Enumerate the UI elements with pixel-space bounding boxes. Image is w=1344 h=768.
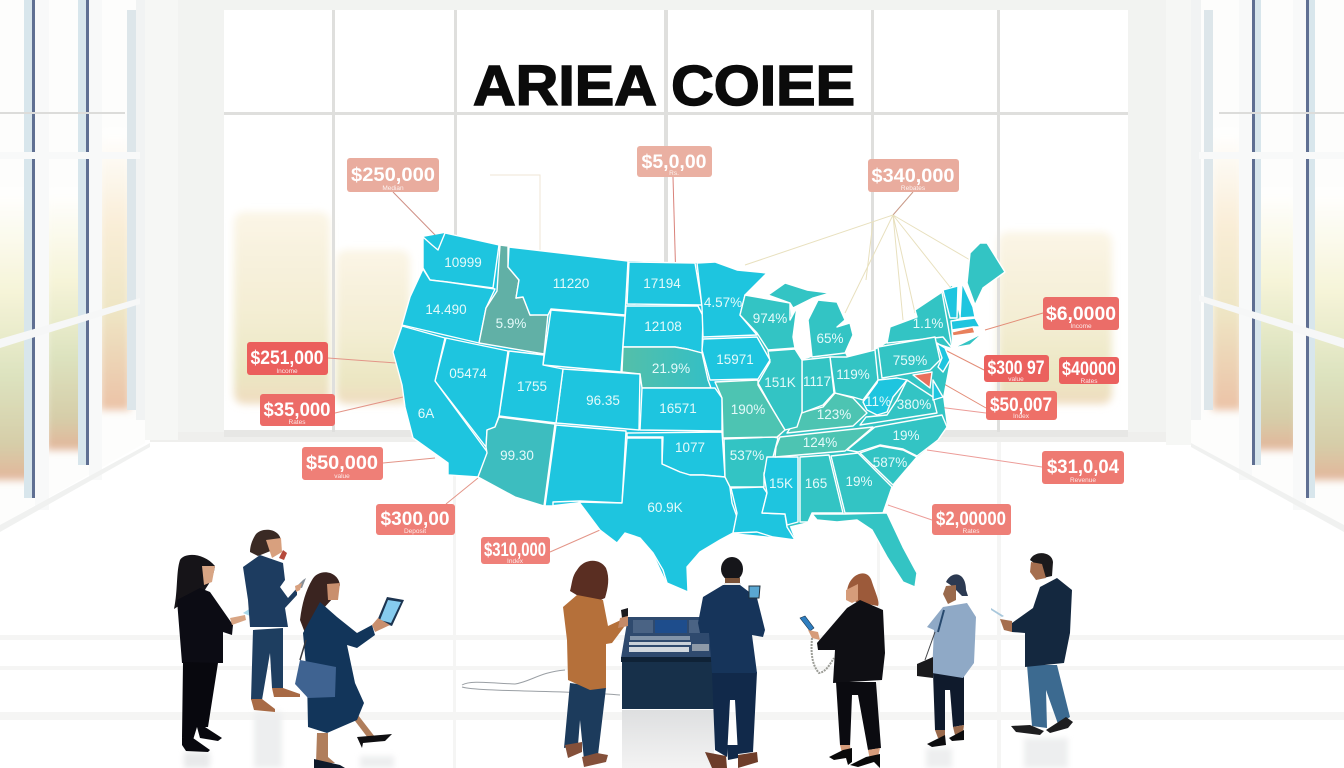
state: Washington: 10999 bbox=[444, 255, 482, 270]
label: left 2 bbox=[260, 394, 335, 426]
floor bands bbox=[0, 442, 1344, 768]
label: bottom centre: Index bbox=[507, 558, 524, 565]
label: bottom left bbox=[376, 504, 455, 535]
state: South Carolina: 587% bbox=[873, 455, 907, 470]
state: Florida bbox=[812, 513, 917, 587]
label: right 5: $31,0,04 bbox=[1047, 457, 1119, 478]
state: Texas bbox=[579, 438, 737, 592]
label: bottom left: Deposit bbox=[404, 528, 426, 535]
label: right 5 bbox=[1042, 451, 1124, 484]
state: Illinois bbox=[758, 349, 802, 430]
state: Nevada bbox=[435, 338, 508, 447]
label: top right: Rebates bbox=[901, 185, 926, 192]
person: woman in black with corded phone bbox=[800, 573, 885, 768]
state: Connecticut and Rhode Island bbox=[952, 327, 975, 336]
label: left 2: Rates bbox=[289, 419, 306, 426]
label: right 2 bbox=[984, 355, 1049, 383]
label: top centre bbox=[637, 146, 712, 177]
state: Michigan lower bbox=[808, 300, 853, 357]
label: right 6: $2,00000 bbox=[936, 509, 1006, 530]
state: Vermont bbox=[943, 286, 958, 318]
label: right 1: Income bbox=[1070, 323, 1092, 330]
state: Oklahoma: 1077 bbox=[675, 440, 705, 455]
state: Delaware bbox=[933, 380, 943, 400]
state: Louisiana bbox=[731, 487, 795, 540]
central window: mullions bbox=[224, 10, 1128, 432]
floor reflections bbox=[184, 712, 1068, 768]
state: Mississippi: 15K bbox=[769, 476, 793, 491]
state: New York bbox=[887, 292, 952, 348]
state: Ohio: 119% bbox=[836, 367, 870, 382]
state: North Carolina bbox=[847, 415, 947, 456]
console reflection bbox=[622, 710, 714, 768]
state: California bbox=[393, 326, 488, 477]
state: Kansas bbox=[640, 388, 722, 431]
state: Minnesota bbox=[697, 262, 767, 337]
state: Nebraska: 21.9% bbox=[652, 361, 690, 376]
state: Arkansas: 537% bbox=[730, 448, 764, 463]
label: top left: $250,000 bbox=[351, 165, 435, 186]
label: top centre: $5,0,00 bbox=[642, 152, 706, 173]
label: left 1: Income bbox=[276, 368, 298, 375]
state: Alabama bbox=[800, 455, 843, 522]
state: Idaho bbox=[479, 245, 548, 354]
state: Mississippi bbox=[762, 457, 798, 525]
label: left 2: $35,000 bbox=[264, 400, 330, 421]
person: woman in blue-grey coat bbox=[917, 574, 976, 747]
state: Missouri bbox=[715, 380, 785, 438]
state: West Virginia: 11% bbox=[865, 394, 891, 409]
state: Montana bbox=[508, 247, 628, 315]
state: Indiana: 1117 bbox=[803, 374, 831, 389]
state: Montana: 11220 bbox=[553, 276, 589, 291]
state: Michigan lower: 65% bbox=[816, 331, 844, 346]
person: woman in navy jacket on phone bbox=[243, 530, 306, 712]
state: South Dakota bbox=[623, 306, 703, 353]
state: Michigan upper bbox=[768, 283, 830, 308]
state: Oregon bbox=[402, 269, 495, 343]
state: Kentucky: 123% bbox=[817, 407, 851, 422]
state: Maryland bbox=[913, 372, 932, 388]
label: top centre: Rs. bbox=[669, 170, 679, 177]
person: woman in black with tablet bbox=[174, 555, 262, 752]
state: Georgia: 19% bbox=[845, 474, 873, 489]
state: New Mexico bbox=[545, 425, 626, 506]
label: left 1: $251,000 bbox=[250, 348, 324, 369]
state: Pennsylvania bbox=[878, 337, 940, 378]
label: right 4: $50,007 bbox=[990, 395, 1052, 416]
state: South Carolina bbox=[860, 446, 917, 485]
state: Georgia bbox=[831, 453, 892, 513]
label: bottom left: $300,00 bbox=[380, 509, 450, 530]
label: right 2: $300 97 bbox=[988, 358, 1044, 379]
label: right 1 bbox=[1043, 297, 1119, 330]
label: bottom centre: $310,000 bbox=[484, 540, 546, 561]
label: right 5: Revenue bbox=[1070, 477, 1096, 484]
label: right 4: Index bbox=[1013, 413, 1030, 420]
state: Oregon: 14.490 bbox=[425, 302, 467, 317]
state: Arkansas bbox=[724, 437, 778, 487]
state: Massachusetts bbox=[951, 318, 980, 330]
right side windows bbox=[1166, 0, 1344, 532]
map of the United States bbox=[393, 233, 1005, 592]
label: right 3 bbox=[1059, 357, 1119, 385]
state: Nebraska bbox=[622, 347, 711, 388]
label: top right bbox=[868, 159, 959, 192]
state: Washington bbox=[423, 233, 499, 288]
label: left 3: value bbox=[334, 473, 350, 480]
state: Idaho: 5.9% bbox=[496, 316, 526, 331]
label: right 6 bbox=[932, 504, 1011, 535]
label: left 3: $50,000 bbox=[306, 453, 378, 474]
label: left 1 bbox=[247, 342, 328, 375]
state: Utah: 1755 bbox=[517, 379, 547, 394]
state: Wisconsin: 974% bbox=[753, 311, 787, 326]
label: left 3 bbox=[302, 447, 383, 480]
label: right 3: $40000 bbox=[1062, 359, 1116, 380]
state: South Dakota: 12108 bbox=[644, 319, 682, 334]
state: Nevada: 05474 bbox=[449, 366, 487, 381]
person: man in navy blazer with tablet bbox=[991, 553, 1073, 735]
state: Texas: 60.9K bbox=[647, 500, 683, 515]
state: Indiana bbox=[802, 357, 834, 413]
label: right 4 bbox=[986, 391, 1057, 420]
label: right 1: $6,0000 bbox=[1046, 304, 1116, 325]
label: top left: Median bbox=[382, 185, 404, 192]
left side windows bbox=[0, 0, 178, 532]
state: Iowa bbox=[702, 337, 770, 380]
console machine bbox=[621, 617, 714, 709]
state: Kansas: 16571 bbox=[659, 401, 697, 416]
connector lines bbox=[328, 175, 1043, 552]
state: Minnesota: 4.57% bbox=[704, 295, 742, 310]
state: Utah bbox=[499, 351, 563, 423]
person: man in navy suit from behind bbox=[698, 557, 765, 768]
label: top right: $340,000 bbox=[872, 166, 954, 187]
state: Arizona: 99.30 bbox=[500, 448, 534, 463]
state: New York: 1.1% bbox=[913, 316, 943, 331]
label: right 2: value bbox=[1008, 376, 1024, 383]
label: top left bbox=[347, 158, 439, 192]
state: Colorado: 96.35 bbox=[586, 393, 620, 408]
state: California: 6A bbox=[418, 406, 434, 421]
person: woman in orange coat bbox=[563, 561, 628, 767]
state: Colorado bbox=[556, 369, 640, 430]
state: Long Island bbox=[953, 333, 983, 348]
title: ARIEA COIEE bbox=[473, 54, 855, 118]
person: woman in navy coat with tablet and bag bbox=[295, 572, 404, 768]
state: Kentucky bbox=[787, 393, 867, 433]
state: North Dakota: 17194 bbox=[643, 276, 681, 291]
state: New Jersey bbox=[937, 343, 950, 372]
state: Illinois: 151K bbox=[764, 375, 796, 390]
state: Iowa: 15971 bbox=[716, 352, 754, 367]
label: bottom centre bbox=[481, 537, 550, 565]
state: Oklahoma bbox=[627, 432, 725, 477]
state: Pennsylvania: 759% bbox=[893, 353, 927, 368]
cable on floor bbox=[462, 670, 620, 695]
value labels bbox=[247, 146, 1124, 565]
state: Wyoming bbox=[543, 310, 625, 372]
state: Alabama: 165 bbox=[805, 476, 827, 491]
map underlay: western states bbox=[393, 233, 795, 592]
state: Virginia: 380% bbox=[897, 397, 931, 412]
state: Maine bbox=[967, 243, 1005, 305]
state: Ohio bbox=[830, 350, 878, 400]
state: Tennessee bbox=[775, 427, 873, 457]
map underlay: eastern states bbox=[740, 286, 960, 527]
central window: trees bbox=[234, 212, 1112, 404]
label: right 3: Rates bbox=[1081, 378, 1098, 385]
state: North Carolina: 19% bbox=[892, 428, 920, 443]
state: Virginia bbox=[860, 380, 937, 425]
state: Wisconsin bbox=[740, 295, 797, 350]
label: right 6: Rates bbox=[963, 528, 980, 535]
state: West Virginia bbox=[863, 378, 907, 415]
state: Tennessee: 124% bbox=[803, 435, 837, 450]
state: New Hampshire bbox=[960, 283, 975, 318]
state: Missouri: 190% bbox=[731, 402, 765, 417]
state: North Dakota bbox=[627, 262, 702, 305]
state: Arizona bbox=[478, 417, 555, 506]
